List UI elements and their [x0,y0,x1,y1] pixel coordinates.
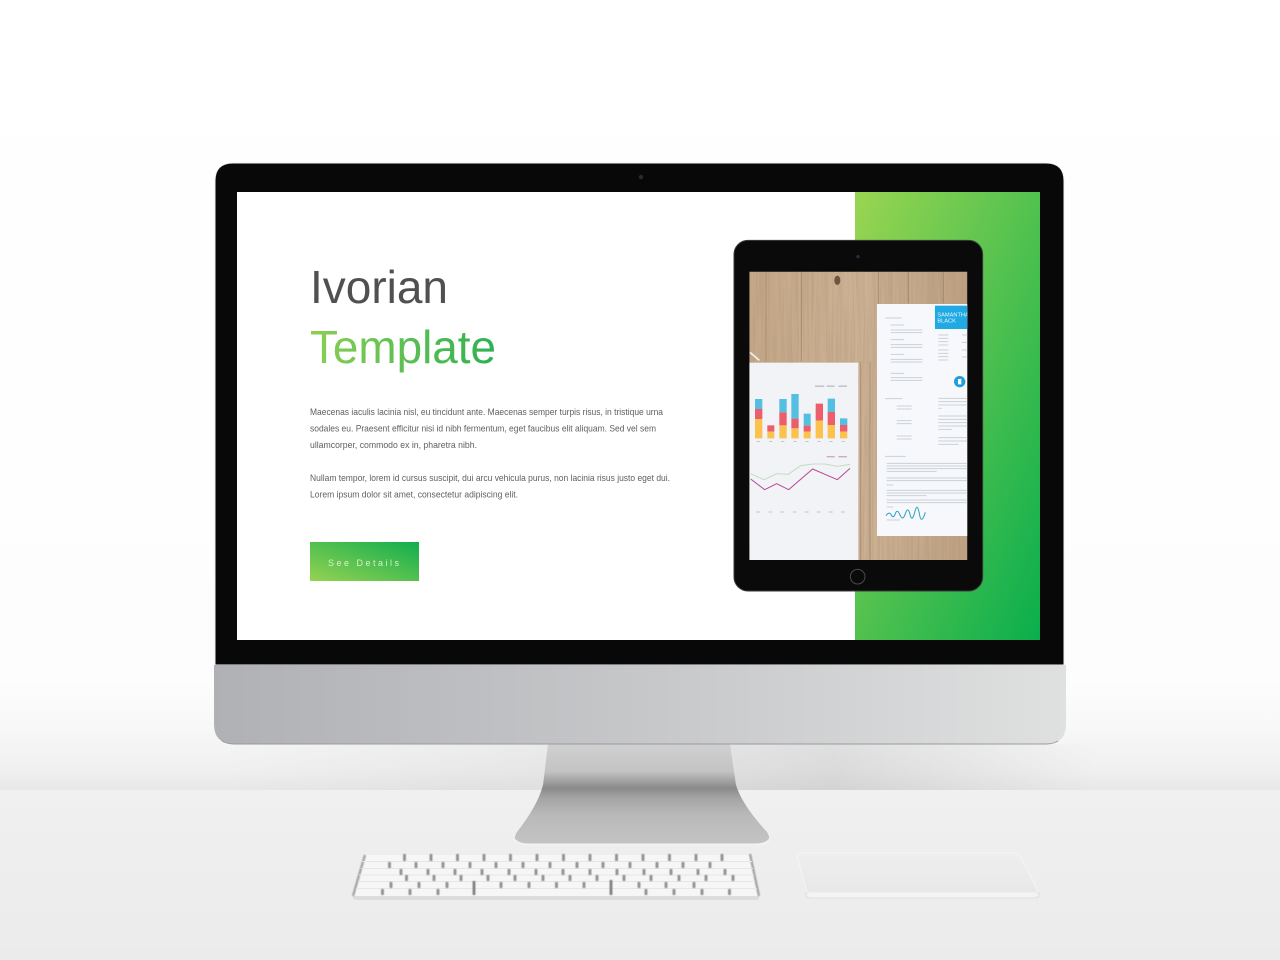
monitor stand [514,744,770,844]
keyboard lip [353,895,759,900]
stand base rim [514,839,770,844]
trackpad [797,853,1039,898]
monitor chin [214,665,1066,744]
monitor [214,163,1066,744]
resume header: SAMANTHA [937,312,969,318]
title: Ivorian [310,261,448,313]
keyboard [353,854,759,900]
green side panel [855,192,1040,640]
resume text lines [885,318,967,520]
keyboard horizontal lines [356,862,757,888]
resume signature [886,507,925,519]
body text: Nullam tempor, lorem id cursus suscipit, dui arcu vehicula purus, non lacinia risus justo eget dui. [310,472,670,483]
body text: Lorem ipsum dolor sit amet, consectetur adipiscing elit. [310,488,518,500]
resume profile badge [954,376,965,387]
body text: Maecenas iaculis lacinia nisl, eu tincidunt ante. Maecenas semper turpis risus, in tristique urna [310,406,664,417]
body text: ullamcorper, commodo ex in, pharetra nibh. [310,439,477,450]
tablet [734,240,983,591]
button: see details [310,542,419,581]
stacked bar chart [755,385,847,442]
keyboard top [353,855,759,896]
body text: sodales eu. Praesent efficitur nisi id nibh fermentum, eget faucibus elit aliquam. Sed vel sem [310,422,656,434]
tablet home button [850,569,865,584]
line chart [751,457,850,512]
tablet screen photo [749,272,969,560]
trackpad lip [806,893,1039,898]
screen slide [237,192,1040,640]
webcam [639,175,643,179]
tablet camera [856,255,860,258]
title: Template [310,321,496,373]
monitor bezel [215,163,1064,665]
report paper with charts [749,363,858,560]
chin bottom edge [222,741,1058,744]
resume header [935,306,969,329]
tablet body [734,240,983,591]
resume paper [877,304,969,536]
resume header: BLACK [937,318,956,324]
button: see details: See Details [328,558,400,568]
keyboard row gaps [382,854,733,895]
title [310,261,496,373]
keyboard side edges [353,854,759,896]
keyboard spacebar gaps [474,880,611,895]
body text [310,406,670,500]
trackpad top [797,853,1038,893]
desk surface [0,790,1280,960]
monitor shadow on wall [214,744,1100,790]
